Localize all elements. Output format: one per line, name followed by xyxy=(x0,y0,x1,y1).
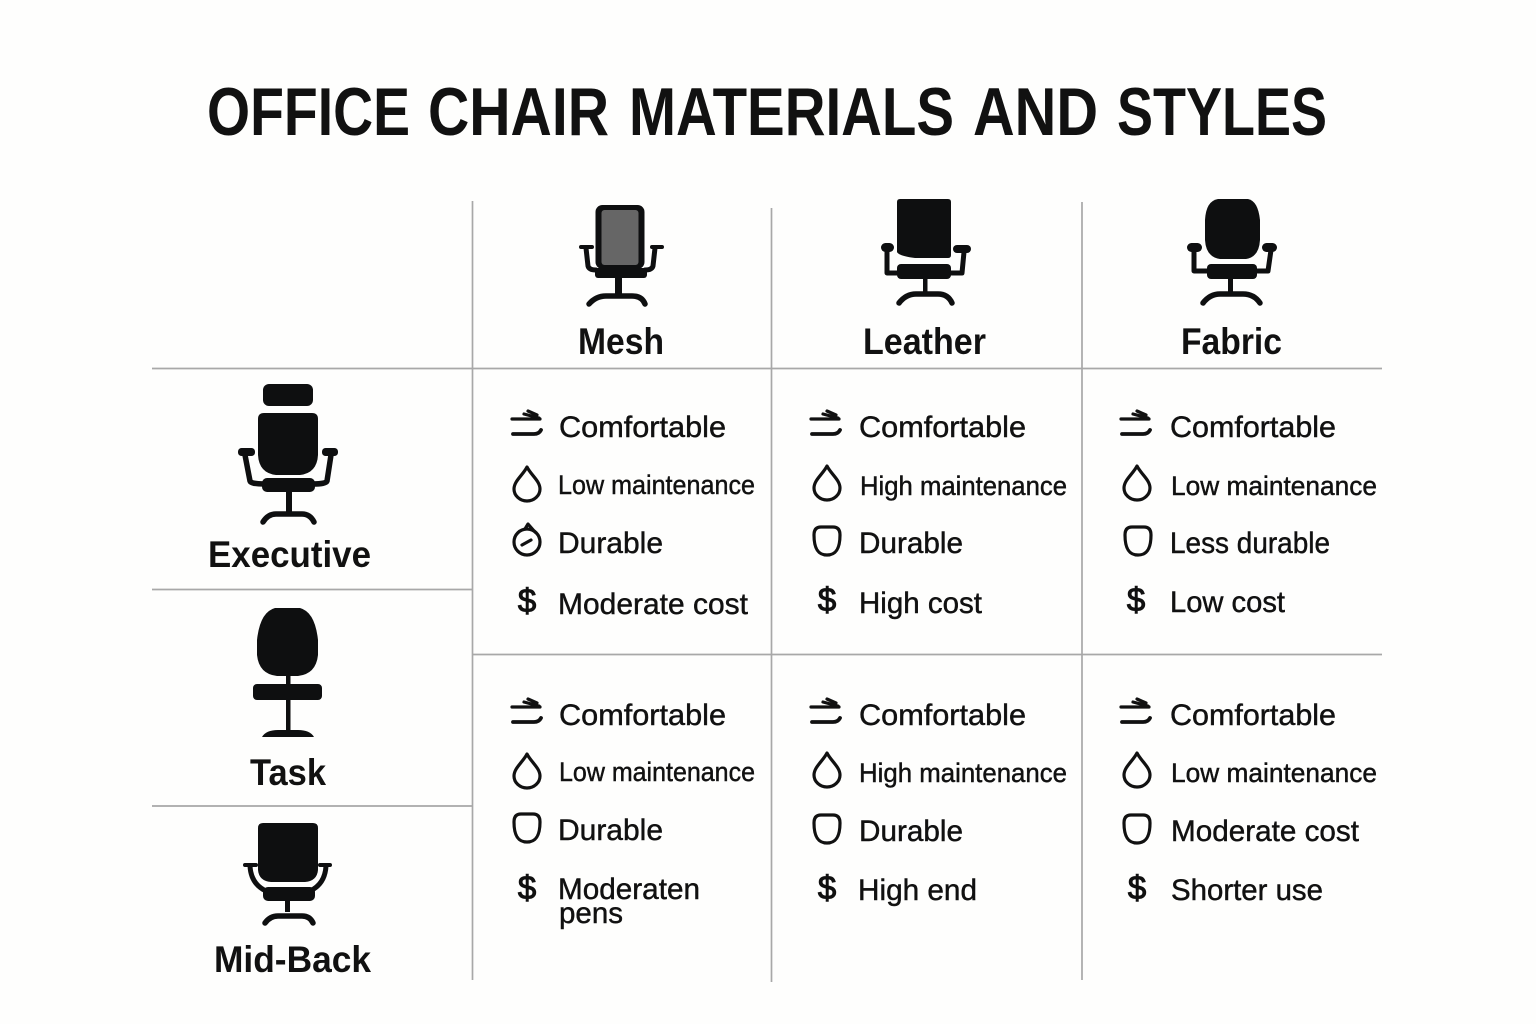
item: Moderaten pens: pens xyxy=(559,897,623,930)
row header: Executive xyxy=(208,384,371,575)
item: High maintenance: High maintenance xyxy=(860,471,1067,501)
item: Durable: Durable xyxy=(558,527,663,560)
item: High maintenance xyxy=(814,753,1067,788)
item: Shorter use: Shorter use xyxy=(1171,874,1323,907)
cell: Executive Mesh xyxy=(512,411,755,621)
cell: Executive Fabric xyxy=(1121,411,1377,619)
row header: Task xyxy=(250,608,326,793)
column header: Leather xyxy=(863,199,986,362)
title: OFFICE xyxy=(207,74,410,150)
item: High cost: High cost xyxy=(859,587,983,620)
icon: executive chair xyxy=(238,384,338,522)
icon: task chair xyxy=(253,608,322,737)
item: Durable: Durable xyxy=(859,815,963,848)
item: Comfortable: Comfortable xyxy=(559,411,726,444)
column header: Mesh xyxy=(578,205,664,362)
item: High cost: $ xyxy=(818,581,836,618)
item: Low maintenance: Low maintenance xyxy=(559,757,755,787)
item: Comfortable: Comfortable xyxy=(1170,699,1336,732)
item: Comfortable: Comfortable xyxy=(559,699,726,732)
item: Low maintenance: Low maintenance xyxy=(1171,471,1377,501)
label: Mesh: Mesh xyxy=(578,321,664,362)
row header: Mid-Back xyxy=(214,823,371,980)
item: Low maintenance xyxy=(514,754,755,788)
item: Moderaten pens xyxy=(518,869,700,930)
label: Mid-Back: Mid-Back xyxy=(214,939,371,980)
item: Low maintenance xyxy=(514,467,755,501)
icon: leather chair xyxy=(881,199,971,303)
item: Durable xyxy=(814,815,963,848)
item: Moderate cost xyxy=(518,582,749,621)
label: Fabric: Fabric xyxy=(1181,321,1282,362)
item: Low maintenance xyxy=(1124,753,1377,788)
label: Task: Task xyxy=(250,752,326,793)
item: Low cost: $ xyxy=(1127,581,1145,618)
item: Moderaten pens: $ xyxy=(518,869,536,906)
item: Moderate cost: $ xyxy=(518,582,536,619)
item: High end: $ xyxy=(818,869,836,906)
icon: fabric chair xyxy=(1187,199,1277,303)
title: CHAIR xyxy=(428,74,609,150)
item: High cost xyxy=(818,581,983,620)
icon: mid-back chair xyxy=(245,823,330,923)
title: MATERIALS xyxy=(629,74,954,150)
cell: Task and Mid-Back Mesh xyxy=(512,699,755,930)
item: Durable xyxy=(814,527,963,560)
item: Durable: Durable xyxy=(558,814,663,847)
item: Durable xyxy=(514,524,663,560)
item: High maintenance: High maintenance xyxy=(859,758,1067,788)
item: Durable: Durable xyxy=(859,527,963,560)
item: High maintenance xyxy=(814,466,1067,501)
item: Moderaten pens: Moderaten xyxy=(558,873,700,906)
title: STYLES xyxy=(1117,74,1327,150)
cell: Executive Leather xyxy=(811,411,1067,620)
title: AND xyxy=(973,74,1098,150)
item: Moderate cost: Moderate cost xyxy=(558,588,749,621)
column header: Fabric xyxy=(1181,199,1282,362)
item: Low cost: Low cost xyxy=(1170,586,1286,619)
item: Comfortable: Comfortable xyxy=(859,699,1026,732)
item: Low maintenance xyxy=(1124,466,1377,501)
item: Comfortable: Comfortable xyxy=(1170,411,1336,444)
item: High end xyxy=(818,869,977,907)
icon: mesh chair xyxy=(581,205,662,304)
item: Shorter use: $ xyxy=(1128,869,1146,906)
cell: Task and Mid-Back Leather xyxy=(811,699,1067,907)
item: Less durable: Less durable xyxy=(1170,527,1330,560)
label: Executive: Executive xyxy=(208,534,371,575)
table grid lines xyxy=(152,201,1382,982)
item: Moderate cost: Moderate cost xyxy=(1171,815,1360,848)
item: High end: High end xyxy=(858,874,977,907)
item: Comfortable: Comfortable xyxy=(859,411,1026,444)
label: Leather: Leather xyxy=(863,321,986,362)
item: Low maintenance: Low maintenance xyxy=(558,470,755,500)
item: Low cost xyxy=(1127,581,1286,619)
item: Shorter use xyxy=(1128,869,1323,907)
item: Low maintenance: Low maintenance xyxy=(1171,758,1377,788)
cell: Task and Mid-Back Fabric xyxy=(1121,699,1377,907)
